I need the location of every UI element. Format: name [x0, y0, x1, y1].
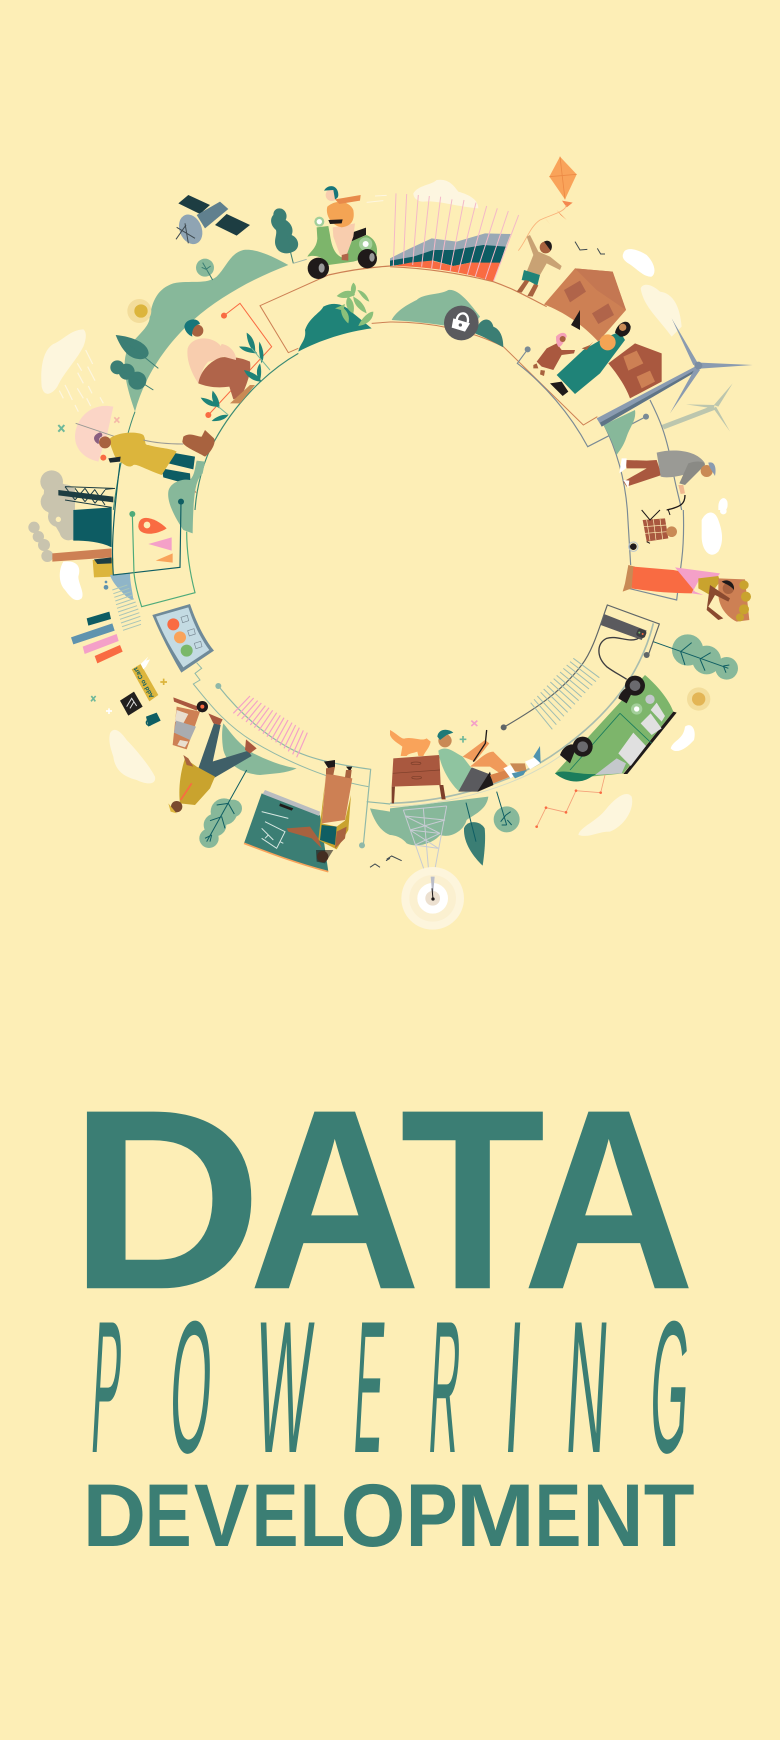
bush under the ring — [390, 797, 488, 845]
heading: DEVELOPMENT: T — [644, 1467, 695, 1566]
icon: sun — [127, 299, 151, 323]
heading: DEVELOPMENT: E — [535, 1466, 581, 1565]
white cloud — [623, 249, 654, 277]
icon: small round tree — [196, 259, 214, 280]
sparkles — [460, 721, 477, 743]
hill behind the upper-left arc — [125, 250, 288, 412]
water — [110, 573, 133, 600]
teacher with book — [287, 760, 352, 863]
factory base — [93, 557, 113, 577]
icon: lobed tree — [271, 208, 298, 263]
signal rings — [401, 867, 464, 930]
heading: DATA: T — [400, 1057, 545, 1343]
mother with baby and child — [533, 322, 631, 396]
green bushes along the inner ring — [392, 290, 635, 455]
tablet with rating faces — [152, 604, 214, 673]
man reading tablet — [437, 730, 541, 792]
black chart card — [120, 692, 143, 716]
scooter and rider — [307, 186, 387, 279]
heading: DEVELOPMENT: L — [300, 1467, 345, 1565]
factory brick wall — [52, 548, 112, 562]
heading: DATA: A — [248, 1055, 421, 1343]
heading: POWERING: E — [349, 1281, 390, 1492]
sparkles — [91, 679, 167, 714]
circuit and frame lines — [390, 322, 682, 510]
cream cloud — [578, 794, 632, 836]
panel: factory and map pins on the left — [28, 461, 205, 607]
woman with umbrella walking dog — [75, 406, 215, 493]
cream cloud — [641, 285, 682, 337]
chalkboard — [244, 790, 328, 872]
heading: POWERING: P — [87, 1281, 127, 1492]
cream cloud — [109, 730, 155, 783]
add to cart button: Add to Cart — [132, 665, 156, 699]
small white blob — [718, 498, 728, 510]
person working at desk — [168, 697, 257, 813]
hatch lines — [112, 585, 141, 630]
woman carrying basket — [623, 565, 751, 622]
pylon arm — [58, 487, 115, 507]
house — [608, 343, 662, 398]
icon: leaf — [116, 335, 158, 368]
gray green hatch — [531, 658, 599, 729]
white blob — [702, 508, 727, 555]
legend bars — [71, 612, 123, 663]
white cloud — [60, 561, 83, 600]
cloud behind line chart — [413, 180, 478, 208]
teal circuit frame — [112, 463, 184, 575]
pink hatch — [233, 696, 307, 757]
heading: POWERING: G — [645, 1283, 695, 1493]
heading: DEVELOPMENT: E — [145, 1466, 192, 1565]
bush near map panel — [168, 461, 205, 533]
green circuit frame — [129, 511, 195, 607]
icon: satellite — [175, 195, 250, 248]
circuit line with orange dots — [205, 303, 272, 418]
heading: POWERING: W — [251, 1282, 317, 1493]
small round tree — [494, 792, 520, 832]
tent — [544, 268, 626, 342]
wind turbine — [597, 318, 753, 427]
pink triangle — [148, 537, 172, 551]
boy flying kite — [517, 235, 562, 297]
heading: DEVELOPMENT: M — [456, 1467, 535, 1565]
panel: lower-right arc — [387, 508, 751, 930]
orange triangle — [156, 553, 173, 563]
water drops — [104, 581, 108, 590]
line chart — [535, 775, 605, 828]
panel: circular illustration upper-right arc — [390, 157, 753, 510]
circuit line from tablet — [193, 663, 368, 787]
charger post and cable — [599, 614, 647, 679]
icon: lobed leaf — [110, 360, 153, 390]
plants around the seated man — [201, 333, 270, 421]
heading: DATA: D — [69, 1055, 263, 1343]
heading: DEVELOPMENT: P — [406, 1465, 458, 1565]
cloud with rain — [41, 329, 103, 412]
lobed leaf tree — [653, 634, 738, 680]
icon: small bird — [387, 856, 402, 861]
orange cat — [390, 730, 431, 756]
outer ring — [390, 623, 653, 803]
sparkles near umbrella — [58, 417, 119, 432]
heading: DEVELOPMENT: V — [194, 1466, 249, 1566]
bush under arc — [222, 723, 297, 775]
road and circuit lines — [113, 259, 390, 510]
heading: DEVELOPMENT: D — [83, 1466, 146, 1565]
gray frame lines around cart — [627, 510, 684, 600]
heading: POWERING: I — [501, 1283, 528, 1493]
heading: DEVELOPMENT: O — [341, 1466, 405, 1566]
child in shopping cart — [629, 510, 677, 551]
bush with plant — [298, 283, 373, 352]
electric car — [555, 675, 677, 781]
heading: DEVELOPMENT — [83, 1465, 695, 1566]
icon: birds — [575, 242, 605, 254]
bush below the ring — [370, 808, 390, 835]
factory block — [73, 507, 112, 547]
heading: POWERING: N — [562, 1283, 613, 1493]
icon: location pin — [138, 518, 167, 534]
old man bending over shopping cart — [619, 451, 716, 510]
road line under boy and tent — [390, 267, 547, 307]
small distant wind turbine — [662, 383, 733, 432]
hanging leaf — [464, 803, 485, 866]
panel: circular illustration upper-left arc — [41, 186, 390, 510]
add to cart button — [132, 657, 158, 701]
icon: kite — [518, 157, 577, 251]
heading: POWERING: O — [165, 1283, 217, 1493]
shopping bag — [146, 713, 161, 727]
small smoke — [28, 522, 53, 562]
panel: lower-left arc — [71, 585, 390, 872]
heading: POWERING — [87, 1281, 695, 1493]
stacked area chart with pink grid — [390, 193, 519, 282]
icon: small bird — [370, 858, 390, 867]
gray circuit line with dots — [501, 605, 659, 730]
icon: padlock — [444, 306, 479, 340]
heading: DATA: A — [522, 1055, 695, 1343]
icon: sun — [687, 687, 710, 711]
heading: DATA — [69, 1055, 695, 1343]
heading: DEVELOPMENT: E — [252, 1466, 298, 1565]
large smoke — [40, 470, 77, 541]
lobed tree — [199, 770, 247, 848]
white cloud — [671, 725, 695, 751]
seated man in turban — [184, 319, 255, 403]
dresser — [392, 755, 446, 803]
heading: DEVELOPMENT: N — [582, 1466, 644, 1565]
transmission tower — [403, 806, 447, 887]
circuit line with dots — [215, 683, 371, 848]
heading: POWERING: R — [425, 1281, 466, 1492]
